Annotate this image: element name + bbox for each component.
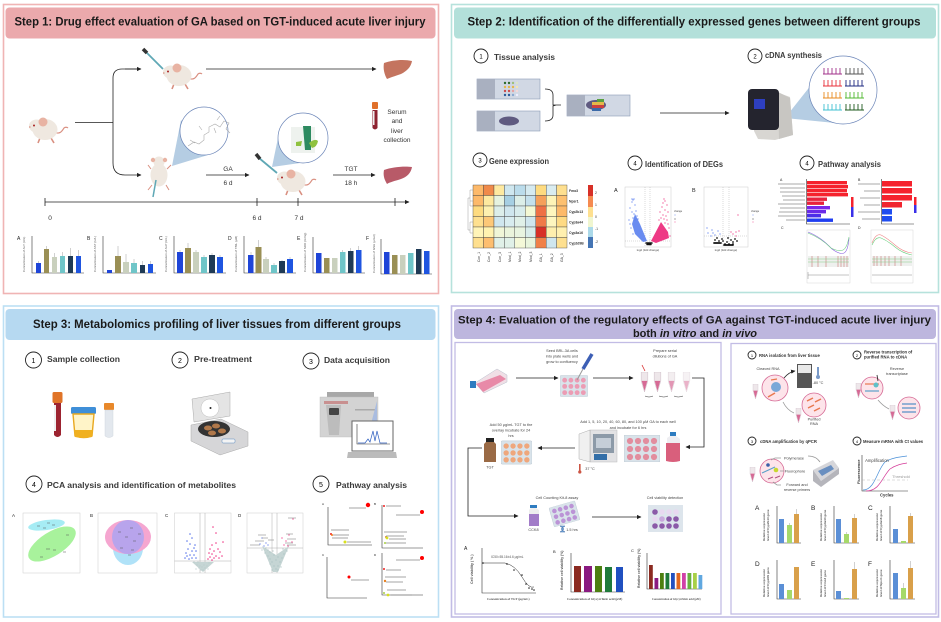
heatmap: Cyp2d9B (569, 242, 584, 246)
heading: gene expression: 3 (478, 158, 482, 164)
icon: starting mouse (29, 118, 68, 143)
timeline: 0 (48, 215, 52, 222)
arrow: GA 6 d (206, 166, 249, 187)
heading: RNA isolation: RNA isolation from liver tissue (759, 353, 820, 358)
icon: RNA isolation diagram (753, 364, 826, 426)
chart: metabolite volcano C (165, 513, 231, 573)
heading: pathway analysis (313, 476, 408, 492)
text: serial dilutions: Prepare serial (653, 349, 677, 353)
bar chart: glycyrrhizic acid viability: Concentration of Glycyrrhizic acid (μM) (567, 597, 622, 601)
arrow: GA 6 d: GA (223, 166, 233, 173)
icon: reverse transcription diagram (856, 367, 920, 420)
icon: brace combining slides (545, 89, 561, 121)
heading: step 3 (6, 309, 436, 340)
bar chart: F Npsr1: level of Npsr1 gene (879, 569, 883, 597)
text: seed cells: into plate wells and (546, 354, 578, 358)
heatmap: Fmo3 (569, 189, 578, 193)
bar chart: B Cyp3a44 (811, 505, 859, 543)
heatmap: Con_1 (477, 252, 481, 262)
bar chart: C Cyp3a16: C (868, 505, 873, 512)
chart: volcano plot B: log2 (fold change) (715, 248, 737, 252)
bar chart: glycyrrhizic acid viability: Relative cell viability (%) (560, 551, 564, 590)
icon: thermal cycler with callout (748, 56, 877, 140)
bar chart: F GSH: F (366, 236, 369, 242)
text: serial dilutions (653, 349, 678, 358)
heading: cDNA synthesis: 2 (753, 54, 757, 60)
bar chart: F Npsr1: Relative expression (875, 569, 879, 597)
chart: IC50 dose response: Concentration of TGT (μg/mL) (487, 597, 530, 601)
heading: RNA isolation (748, 351, 820, 359)
text: seed cells: Seed BRL-3A cells (546, 349, 578, 353)
heatmap: 1 (595, 203, 597, 207)
bar chart: F Npsr1 (868, 560, 915, 599)
heading: pathway analysis: Pathway analysis (336, 481, 408, 490)
icon: glycyrrhizic acid molecule callout (172, 107, 230, 166)
icon: reverse transcription diagram: transcriptase (886, 372, 908, 376)
text: add TGT: Add 50 μg/mL TGT to the (490, 423, 532, 427)
bar chart: enrichment B (858, 178, 916, 224)
icon: tripterygium glycosides tablet callout (272, 113, 328, 167)
bar chart: F GSH: Concentration of GSH (μmol) (372, 234, 376, 273)
bar chart: A ALT (17, 236, 84, 273)
bar chart: C Cyp3a16 (868, 505, 915, 543)
bar chart: C ALP: Concentration of ALP (U/L) (164, 236, 168, 272)
heatmap: Con_3 (498, 252, 502, 262)
bar chart: E Fmo3: Relative expression (819, 569, 823, 597)
heading: step 1: Step 1: Drug effect evaluation of GA based on TGT-induced acute liver injury (14, 16, 426, 28)
bar chart: D TBIL (228, 236, 296, 273)
icon: qPCR amplification diagram: Polymerase (784, 456, 804, 460)
heading: identification of DEGs: 4 (633, 162, 637, 168)
heading: cDNA amplification: cDNA amplification by qPCR (760, 439, 817, 444)
chart: IC50 dose response: Cell viability ( % ) (470, 554, 474, 584)
heatmap: -1 (595, 227, 598, 231)
bar chart: B AST: Concentration of AST (U/L) (93, 236, 97, 272)
heading: step 4: both in vitro and in vivo (633, 328, 757, 340)
icon: injured liver (384, 167, 412, 184)
chart: volcano plot B (692, 187, 760, 252)
icon: reverse transcription diagram: Reverse (890, 367, 904, 371)
heading: PCA analysis: PCA analysis and identification of metabolites (47, 481, 237, 490)
text: 37 C with thermometer: 37 °C (585, 467, 595, 471)
chart: amplification curves (857, 455, 910, 498)
text: serial dilutions: dilutions of GA (653, 354, 678, 358)
heading: pre-treatment (172, 352, 252, 368)
bar chart: GA with TGT viability: Concentration of Glycyrrhizic acid (μM) (652, 598, 701, 601)
chart: volcano plot B: change (751, 210, 760, 213)
icon: viability plate (648, 505, 683, 532)
bar chart: A ALT: Concentration of ALT (U/L) (22, 237, 26, 272)
chart: IC50 dose response (464, 546, 536, 601)
bar chart: glycyrrhizic acid viability: B (553, 549, 556, 554)
panel: step 2 (452, 4, 938, 292)
heatmap: Cyp3a16 (569, 231, 583, 235)
text: add TGT: overlay incubate for 24 (492, 428, 530, 432)
bar chart: A Cyp2b13: A (755, 505, 760, 512)
timeline (45, 198, 409, 222)
chart: PCA plot B: B (90, 513, 93, 518)
icon: laptop with chromatogram (347, 421, 397, 458)
bar chart: GA with TGT viability: Relative cell viability (%) (637, 549, 641, 588)
bar chart: B Cyp3a44: Relative expression (819, 513, 823, 541)
text: seed cells: grow to confluency (546, 360, 578, 364)
timeline: 7 d (294, 215, 304, 222)
icon: TGT bottle (484, 438, 496, 470)
heatmap: Mod_3 (529, 252, 533, 262)
heading: step 3: Step 3: Metabolomics profiling of liver tissues from different groups (33, 319, 401, 331)
heading: cDNA amplification: 3 (751, 439, 754, 444)
heading: tissue analysis (474, 49, 556, 63)
arrow: TGT 18 h: TGT (344, 166, 358, 173)
heading: cDNA synthesis: cDNA synthesis (765, 51, 823, 60)
chart: pathway bubble plot B: B (374, 502, 376, 506)
heading: reverse transcription (853, 350, 913, 360)
heatmap: Mod_1 (508, 252, 512, 262)
heading: pathway analysis: 5 (319, 482, 323, 489)
text: add TGT: hrs (508, 434, 514, 438)
icon: CCK8 bottle: CCK8 (528, 528, 539, 532)
icon: TGT bottle: TGT (486, 466, 494, 470)
heatmap: Npsr1 (569, 200, 579, 204)
heading: sample collection: Sample collection (47, 355, 120, 364)
bar chart: B Cyp3a44: B (811, 505, 815, 512)
heading: sample collection (26, 352, 120, 368)
chart: pathway bubble plot D (374, 553, 424, 596)
icon: qPCR amplification diagram (750, 456, 810, 492)
icon: RNA isolation diagram: Purified (808, 418, 820, 422)
bar chart: C Cyp3a16: level of Cyp3a16 gene (879, 509, 883, 541)
heading: step 1 (6, 8, 436, 38)
text: CCK8 assay: Cell Counting Kit-8 assay (536, 496, 578, 500)
arrow: dilutions to overlay (686, 378, 704, 447)
chart: GSEA plot C: C (781, 226, 784, 230)
bar chart: D Cyp2b9: level of Cyp2d9 gene (766, 567, 770, 597)
chart: pathway bubble plot D: D (374, 553, 377, 557)
bar chart: C ALP: C (159, 236, 163, 242)
bar chart: GA with TGT viability (631, 548, 702, 601)
heading: reverse transcription: purified RNA to cDNA (864, 354, 907, 360)
chart: metabolite volcano D (238, 513, 303, 573)
arrow: GA 6 d: 6 d (223, 180, 233, 187)
chart: metabolite volcano D: D (238, 513, 242, 518)
heatmap: Cyp2b13 (569, 210, 583, 214)
bar chart: B Cyp3a44: level of Cyp3a44 gene (823, 509, 827, 541)
chart: IC50 dose response: IC50=55.16±4.6 μg/mL (491, 555, 524, 559)
panel: in vitro (455, 342, 721, 614)
heading: identification of DEGs (628, 156, 724, 170)
icon: model mouse with dropper (256, 154, 316, 195)
heading: sample collection: 1 (32, 358, 36, 365)
bar chart: E SOD: Concentration of SOD (U/mg) (303, 233, 307, 272)
heading: step 2: Step 2: Identification of the differentially expressed genes between different groups (468, 16, 920, 28)
heading: pathway analysis: 4 (805, 162, 809, 168)
bar chart: E SOD (297, 233, 365, 273)
chart: GSEA plot D (858, 226, 913, 283)
heading: tissue analysis: 1 (479, 54, 483, 60)
bar chart: enrichment B: B (858, 178, 861, 182)
bar chart: A Cyp2b13: level of Cyp2b13 gene (766, 509, 770, 541)
bar chart: E SOD: E (297, 236, 301, 242)
heatmap: -2 (595, 240, 598, 244)
arrow: branching treatment paths (75, 69, 141, 175)
chart: PCA plot A (12, 513, 81, 573)
bar chart: D Cyp2b9: Relative expression (762, 569, 766, 597)
icon: merged slide (567, 95, 630, 116)
timeline: 6 d (252, 215, 262, 222)
icon: sample containers (52, 392, 114, 438)
heading: identification of DEGs: Identification of DEGs (645, 160, 724, 169)
icon: CCK8 plate and timer: 1.5 hrs (566, 528, 578, 532)
heatmap: GA_1 (539, 253, 543, 262)
heading: RNA isolation: 1 (751, 353, 754, 358)
bar chart: C Cyp3a16: Relative expression (875, 513, 879, 541)
icon: qPCR amplification diagram: reverse primers (784, 488, 810, 492)
heading: pathway analysis: Pathway analysis (818, 160, 882, 169)
chart: pathway bubble plot A (322, 502, 372, 545)
heading: step 4: Step 4: Evaluation of the regulatory effects of GA against TGT-induced acute liver injury (458, 314, 932, 326)
arrow: to cDNA synthesis (660, 112, 729, 114)
heatmap: GA_2 (550, 253, 554, 262)
icon: CCK8 plate and timer (549, 501, 580, 532)
arrow: TGT 18 h (333, 166, 375, 187)
bar chart: E Fmo3: E (811, 561, 816, 568)
heading: pre-treatment: 2 (178, 358, 182, 365)
icon: centrifuge (191, 392, 248, 455)
chart: amplification curves: Fluorescence (857, 460, 861, 484)
heatmap (468, 185, 598, 262)
icon: array slide with spots (477, 79, 540, 99)
heading: data acquisition: 3 (309, 359, 313, 366)
bar chart: B AST: B (87, 236, 91, 242)
bar chart: E Fmo3 (811, 560, 859, 599)
text: add GA: and incubate for 6 hrs (610, 426, 646, 430)
arrow: seeding to dilutions (593, 377, 633, 379)
icon: RNA isolation diagram: -80 °C (813, 381, 824, 385)
icon: qPCR amplification diagram: Forward and (786, 483, 808, 487)
icon: supine mouse receiving injection (148, 156, 171, 197)
panel: step 1 (4, 4, 438, 294)
heatmap: Con_2 (487, 252, 491, 262)
icon: healthy liver (384, 60, 412, 79)
chart: amplification curves: Threshold (892, 474, 910, 479)
chart: pathway bubble plot B (374, 502, 424, 548)
icon: RNA isolation diagram: Cleaved RNA (756, 367, 780, 371)
icon: qPCR amplification diagram: Fluorophore (785, 470, 805, 474)
text: seed cells (546, 349, 578, 364)
icon: qPCR instrument (808, 456, 839, 487)
heading: pre-treatment: Pre-treatment (194, 355, 252, 364)
icon: control mouse with dropper (143, 49, 202, 89)
chart: PCA plot B (90, 513, 157, 573)
heatmap: Cyp3a44 (569, 220, 583, 224)
text: serum and liver collection: and (392, 118, 403, 125)
bar chart: F GSH (366, 234, 432, 274)
bar chart: D Cyp2b9: D (755, 561, 760, 568)
chart: GSEA plot C (781, 226, 850, 283)
icon: mass spectrometer (320, 392, 378, 437)
icon: serial dilution tubes (641, 365, 690, 397)
heading: measure mRNA: 4 (856, 439, 859, 444)
heading: PCA analysis (26, 476, 237, 492)
bar chart: enrichment A (778, 178, 854, 224)
heading: data acquisition: Data acquisition (324, 356, 390, 365)
text: serum and liver collection: collection (383, 137, 411, 144)
heading: cDNA amplification (748, 437, 817, 445)
chart: volcano plot A: log2 (fold change) (637, 248, 659, 252)
heading: PCA analysis: 4 (32, 482, 36, 489)
icon: seeded plate with pipette (560, 354, 592, 396)
arrow: control to liver (206, 68, 376, 70)
heading: gene expression (473, 153, 549, 167)
heading: pathway analysis (800, 156, 882, 170)
heading: reverse transcription: 2 (856, 353, 859, 358)
heading: tissue analysis: Tissue analysis (494, 53, 556, 62)
arrow: CCK8 to viability (592, 516, 641, 518)
icon: GA treated plate (624, 435, 660, 462)
panel: in vivo (731, 344, 936, 614)
panel: step 4 (452, 306, 938, 617)
bar chart: F Npsr1: F (868, 561, 872, 568)
icon: incubator (579, 430, 617, 462)
chart: GSEA plot D: D (858, 226, 861, 230)
text: 37 C with thermometer (578, 464, 595, 474)
bar chart: D Cyp2b9 (755, 560, 801, 599)
text: serum and liver collection: Serum (387, 109, 407, 116)
arrow: flask to seeding (516, 377, 558, 379)
icon: CCK8 bottle (528, 505, 539, 532)
heading: data acquisition (303, 353, 390, 369)
bar chart: enrichment A: A (780, 178, 783, 182)
chart: amplification curves: Amplification (865, 458, 890, 463)
heading: step 2 (454, 8, 936, 38)
heatmap: Mod_2 (518, 252, 522, 262)
icon: media bottle (666, 432, 680, 462)
icon: tissue slide (477, 111, 540, 131)
chart: pathway bubble plot C (322, 553, 369, 598)
bar chart: B AST (87, 236, 156, 273)
text: viability detection: Cell viability detection (647, 496, 683, 500)
bar chart: A Cyp2b13: Relative expression (762, 513, 766, 541)
arrow: TGT to CCK8 (468, 448, 518, 516)
text: serum and liver collection: liver (391, 128, 404, 135)
bar chart: D TBIL: D (228, 236, 232, 242)
bar chart: D TBIL: Concentration of TBIL (μM) (234, 236, 238, 272)
chart: volcano plot A (614, 187, 683, 252)
panel: step 3 (4, 306, 438, 617)
icon: RNA isolation diagram: RNA (810, 422, 818, 426)
bar chart: A ALT: A (17, 236, 21, 242)
heading: measure mRNA (853, 437, 924, 445)
arrow: incubator to TGT (538, 447, 575, 449)
icon: blood tube (372, 102, 378, 130)
heading: reverse transcription: Reverse transcription of (864, 350, 913, 354)
chart: pathway bubble plot A: A (322, 502, 324, 506)
chart: volcano plot B: B (692, 188, 696, 194)
heatmap: 0 (595, 215, 597, 219)
bar chart: GA with TGT viability: C (631, 548, 634, 553)
chart: volcano plot A: A (614, 188, 618, 194)
heading: measure mRNA: Measure mRNA with Ct values (863, 439, 924, 444)
chart: PCA plot A: A (12, 513, 15, 518)
heading: step 4 (454, 309, 936, 340)
icon: culture flask (470, 369, 507, 393)
text: add TGT (490, 423, 532, 438)
icon: TGT plate (501, 441, 532, 464)
chart: IC50 dose response: A (464, 546, 468, 552)
chart: volcano plot A: change (674, 210, 683, 213)
text: add GA (580, 420, 676, 430)
chart: amplification curves: Cycles (880, 492, 894, 498)
text: serum and liver collection (383, 109, 411, 144)
bar chart: glycyrrhizic acid viability (553, 549, 625, 601)
bar chart: A Cyp2b13 (755, 505, 801, 543)
text: add GA: Add 1, 5, 10, 20, 40, 60, 80, and 100 μM GA to each well (580, 420, 676, 424)
heading: gene expression: Gene expression (489, 157, 549, 166)
heatmap: 2 (595, 191, 597, 195)
bar chart: C ALP (159, 236, 226, 273)
bar chart: E Fmo3: level of Fmo3 gene (823, 570, 827, 597)
chart: pathway bubble plot C: C (322, 553, 325, 557)
arrow: TGT 18 h: 18 h (345, 180, 358, 187)
chart: metabolite volcano C: C (165, 513, 169, 518)
heatmap: GA_3 (560, 253, 564, 262)
heading: cDNA synthesis (748, 49, 823, 63)
